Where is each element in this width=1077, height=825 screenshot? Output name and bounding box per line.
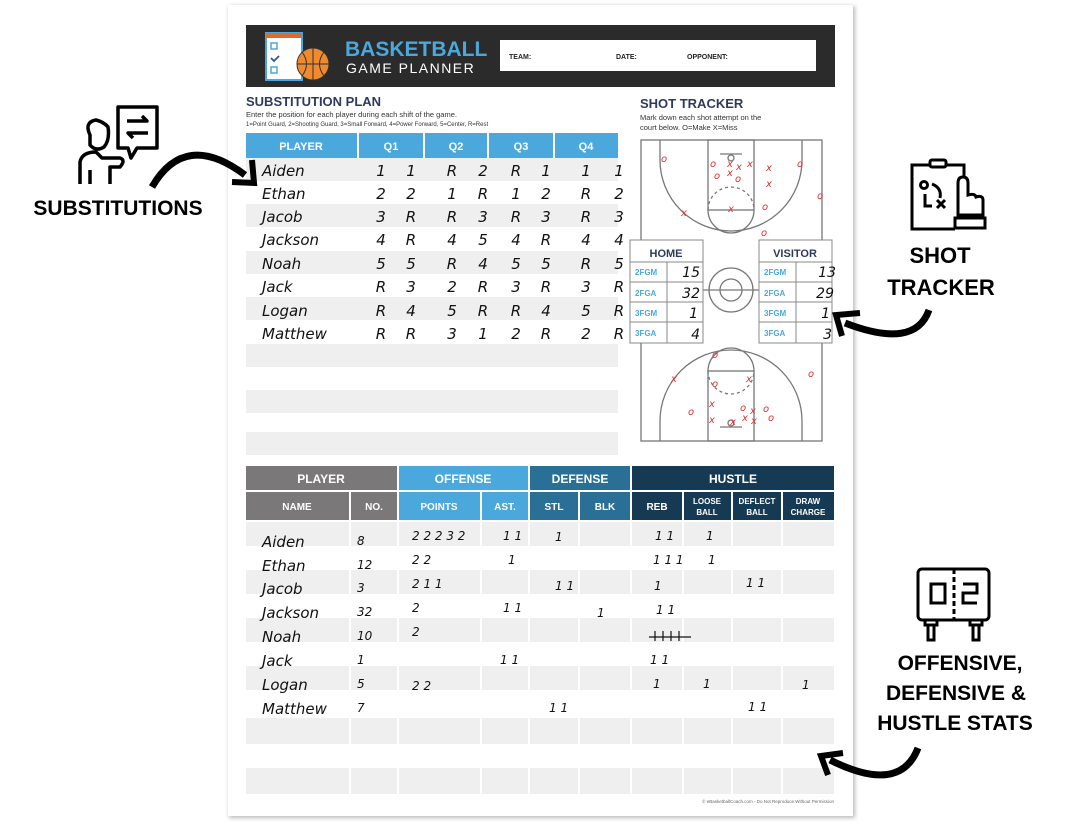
stats table: OFFENSE [435,472,491,486]
stats table: 1 1 [500,653,519,667]
substitution table: 3 [447,325,457,343]
stats table: AST. [494,502,516,513]
stats table: 5 [357,677,365,691]
shot marks: x [749,406,756,417]
stats table: 1 1 [656,603,675,617]
shot marks: x [745,374,752,385]
substitution table: R [511,208,521,226]
stats table: 1 1 [748,700,767,714]
visitor box: VISITOR [773,248,817,260]
stats table: STL [545,502,563,513]
shot marks: x [708,415,715,426]
stats table: 1 1 [503,529,522,543]
visitor box: 3FGM [764,309,787,318]
shot marks: o [712,350,718,361]
home box: 15 [682,265,700,281]
substitution table: 2 [511,325,521,343]
substitution table: R [478,185,488,203]
shot marks: o [808,369,814,380]
home box: 3FGA [635,329,657,338]
substitution table: 1 [581,162,591,180]
stats table: 1 1 [655,529,674,543]
substitution heading: Enter the position for each player during each shift of the game. [246,110,457,119]
substitution table: R [614,278,624,296]
shot marks: o [735,174,741,185]
substitution heading [246,94,488,128]
substitution table: R [406,325,416,343]
substitution table: 2 [406,185,416,203]
stats table: DRAW [796,497,821,506]
stats table: 1 [653,677,661,691]
visitor box: 3 [823,327,832,343]
substitution table: 2 [447,278,457,296]
substitution table: R [478,302,488,320]
label: stats: DEFENSIVE & [886,682,1026,705]
shot tracker heading: SHOT TRACKER [640,96,744,111]
stats table: Logan [262,676,308,694]
home box: 4 [691,327,700,343]
stats table: BLK [595,502,616,513]
shot marks: x [680,208,687,219]
shot marks: o [763,404,769,415]
substitution table: 1 [511,185,521,203]
substitution table: 3 [511,278,521,296]
shot marks: x [726,168,733,179]
substitution table: R [376,325,386,343]
label: stats: OFFENSIVE, [898,652,1022,675]
icon: shot tracker clipboard [912,160,985,229]
substitution table: R [614,325,624,343]
stats table: 1 [654,579,662,593]
stats table: NAME [282,502,312,513]
stats table: 1 1 [549,701,568,715]
header band [246,25,835,87]
visitor box [759,240,836,343]
substitution table: Q1 [384,141,398,153]
substitution table [246,133,624,455]
label: shot tracker [887,243,995,300]
stats table: 2 2 [412,679,431,693]
substitution table: Logan [262,302,308,320]
header band: GAME PLANNER [346,60,475,76]
info box: TEAM: [509,54,531,61]
shot marks: x [750,416,757,427]
stats table: 8 [357,534,365,548]
substitution table: R [447,255,457,273]
stats table: 1 [708,553,716,567]
substitution table: Aiden [261,162,305,180]
substitution table: 5 [447,302,457,320]
substitution table: 5 [406,255,416,273]
substitution table: R [406,208,416,226]
stats table: 2 2 [412,553,431,567]
stats table: 10 [357,629,373,643]
substitution table: R [406,231,416,249]
stats table: 1 [508,553,516,567]
visitor box: 1 [821,306,830,322]
substitution table: 4 [406,302,416,320]
info box: OPPONENT: [687,54,728,61]
shot marks: x [765,163,772,174]
shot marks: o [761,228,767,239]
stats table: Jacob [259,580,303,598]
substitution table: R [614,302,624,320]
substitution table: Q4 [579,141,594,153]
visitor box: 2FGM [764,268,787,277]
stats table: POINTS [420,502,458,513]
substitution table: Q3 [514,141,528,153]
shot marks: x [729,417,736,428]
stats table: 3 [357,581,365,595]
stats table: BALL [696,508,718,517]
visitor box: 29 [816,286,834,302]
stats table: 1 1 1 [653,553,684,567]
stats table: 2 1 1 [412,577,443,591]
substitution table: 1 [447,185,457,203]
shot marks: o [661,154,667,165]
substitution table: R [581,208,591,226]
shot marks: o [817,191,823,202]
stats table: Jack [259,652,294,670]
shot marks: o [762,202,768,213]
substitution table: 4 [376,231,386,249]
substitution table: 4 [541,302,551,320]
icon: substitutions person [80,107,157,184]
shot marks: x [741,413,748,424]
shot marks: x [670,374,677,385]
stats table: Ethan [262,557,306,575]
substitution table: Noah [262,255,301,273]
home box: 32 [682,286,700,302]
substitution table: 3 [406,278,416,296]
substitution table: 5 [376,255,386,273]
stats table: 1 [703,677,711,691]
sheet [228,5,855,818]
substitution table: 5 [511,255,521,273]
shot marks: o [714,171,720,182]
substitution table: R [376,302,386,320]
shot marks: x [727,204,734,215]
substitution table: R [541,278,551,296]
stats table: REB [646,502,668,513]
label: stats [877,652,1033,735]
label: shot tracker: TRACKER [887,275,995,300]
substitution table: R [511,302,521,320]
shot marks: x [726,159,733,170]
home box: 2FGA [635,289,657,298]
stats table: NO. [365,502,383,513]
substitution table: 5 [478,231,488,249]
substitution table: 4 [511,231,521,249]
label: stats: HUSTLE STATS [877,712,1033,735]
stats table: CHARGE [791,508,826,517]
stats table: 1 1 [503,601,522,615]
substitution table: R [447,208,457,226]
substitution table: 4 [581,231,591,249]
substitution table: 3 [541,208,551,226]
shot marks: o [768,413,774,424]
substitution table: 3 [581,278,591,296]
substitution table: R [376,278,386,296]
substitution table: 3 [478,208,488,226]
shot marks: x [735,162,742,173]
icon: checklist and basketball [266,33,329,80]
stats table: PLAYER [297,472,345,486]
stats table: 7 [357,701,365,715]
substitution table: 2 [541,185,551,203]
visitor box: 2FGA [764,289,786,298]
arrow: stats [821,748,918,775]
shot marks: x [746,159,753,170]
substitution table: 5 [541,255,551,273]
substitution table: 5 [614,255,624,273]
stats table: 1 [555,530,563,544]
substitution table: 2 [478,162,488,180]
substitution table: Jack [259,278,294,296]
stats table: 1 1 [650,653,669,667]
shot marks: x [765,179,772,190]
substitution table: R [447,162,457,180]
shot marks: o [740,403,746,414]
stats table: DEFENSE [552,472,608,486]
info box [500,40,816,71]
icon: scoreboard [918,569,989,640]
stats table: 32 [357,605,372,619]
stats table: 1 [357,653,365,667]
arrow: substitutions [152,155,254,187]
substitution table: Jacob [259,208,303,226]
substitution table: 1 [614,162,624,180]
tally strike [649,631,691,641]
stats table [246,466,834,804]
substitution table: 4 [614,231,624,249]
substitution table: R [511,162,521,180]
substitution table: Jackson [259,231,319,249]
stats table: BALL [746,508,768,517]
shot marks: o [710,159,716,170]
home box: 2FGM [635,268,658,277]
substitution table: 2 [614,185,624,203]
stats table: 1 [802,678,810,692]
shot marks: x [708,399,715,410]
home box: 3FGM [635,309,658,318]
stats table: 1 [597,606,605,620]
stats table: 2 [412,601,420,615]
shot marks [661,154,823,428]
substitution table: 3 [614,208,624,226]
label: substitutions: SUBSTITUTIONS [33,197,203,220]
substitution table: 1 [478,325,488,343]
stats table: DEFLECT [739,497,776,506]
shot tracker heading: Mark down each shot attempt on the [640,113,761,122]
substitution table: 4 [447,231,457,249]
stats table: Jackson [259,604,319,622]
substitution table: 2 [376,185,386,203]
substitution table: 3 [376,208,386,226]
stats table: 1 1 [746,576,765,590]
visitor box: 13 [818,265,836,281]
substitution table: 1 [376,162,386,180]
stats table: 2 [412,625,420,639]
substitution table: PLAYER [279,141,323,153]
substitution table: R [541,325,551,343]
info box: DATE: [616,54,637,61]
substitution table: 1 [541,162,551,180]
substitution table: 1 [406,162,416,180]
shot marks: o [688,407,694,418]
substitution table: Q2 [449,141,463,153]
stats table: Aiden [261,533,305,551]
label: shot tracker: SHOT [909,243,971,268]
stats table: Matthew [262,700,328,718]
substitution table: R [478,278,488,296]
stats table: 2 2 2 3 2 [412,529,465,543]
visitor box: 3FGA [764,329,786,338]
substitution table: Ethan [262,185,306,203]
shot tracker heading: court below. O=Make X=Miss [640,123,738,132]
court [641,140,822,441]
home box: 1 [689,306,698,322]
stats table: LOOSE [693,497,722,506]
shot marks: o [797,159,803,170]
home box: HOME [650,248,682,260]
arrow: shot tracker [836,310,929,336]
substitution table: 2 [581,325,591,343]
stats table: HUSTLE [709,472,757,486]
title text: BASKETBALL [345,38,487,61]
shot tracker heading [640,96,761,132]
shot marks: o [712,379,718,390]
substitution heading: SUBSTITUTION PLAN [246,94,381,109]
substitution table: R [581,185,591,203]
substitution table: 4 [478,255,488,273]
stats table: 1 1 [555,579,574,593]
substitution table: R [541,231,551,249]
substitution table: Matthew [262,325,328,343]
substitution heading: 1=Point Guard, 2=Shooting Guard, 3=Small Forward, 4=Power Forward, 5=Center, R=Rest [246,122,488,128]
home box [630,240,703,343]
substitution table: R [581,255,591,273]
substitution table: 5 [581,302,591,320]
stats table: Noah [262,628,301,646]
footer credit: © eBasketballCoach.com - Do Not Reproduce Without Permission [702,798,834,804]
stats table: 12 [357,558,372,572]
stats table: 1 [706,529,714,543]
